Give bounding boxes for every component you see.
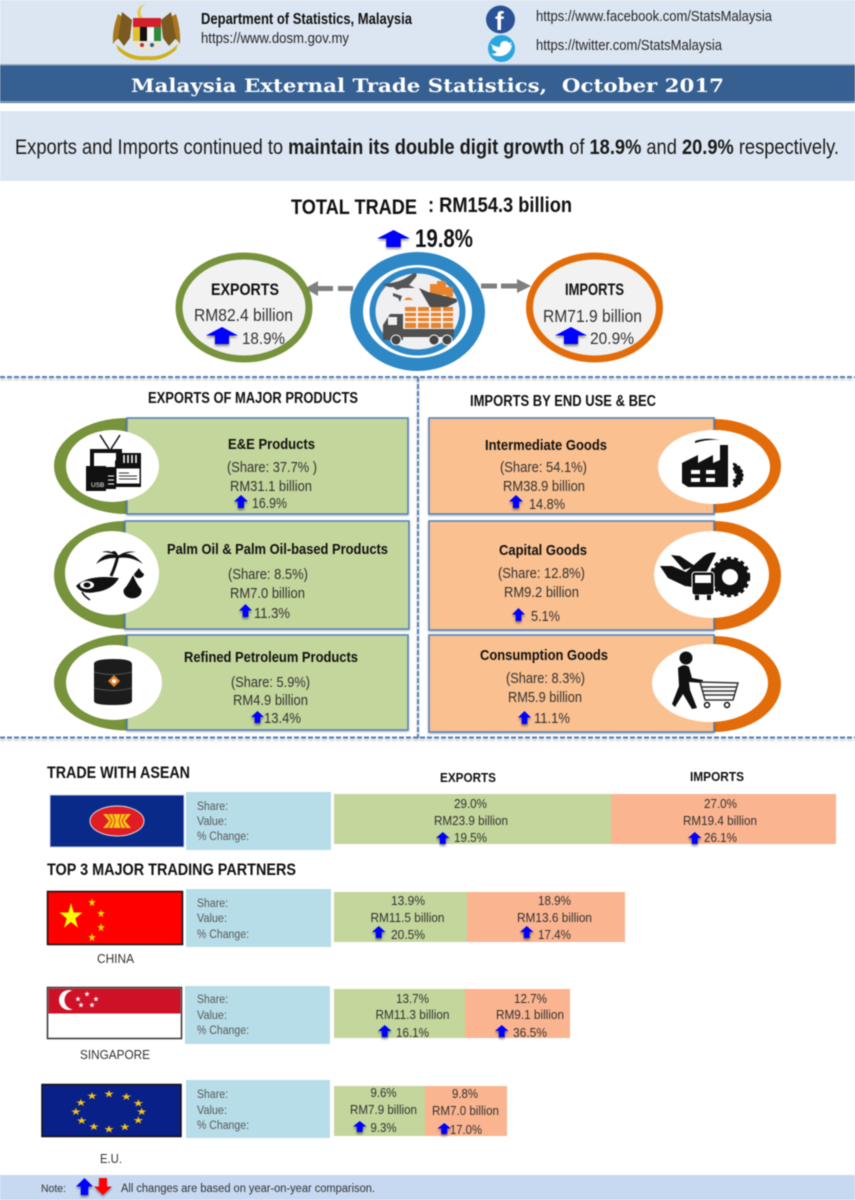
product: refined petroleum: RM4.9 billion [233, 692, 308, 709]
product: intermediate goods: Intermediate Goods [485, 437, 607, 454]
total trade heading: TOTAL TRADE [291, 196, 417, 219]
product: consumption goods: RM5.9 billion [508, 689, 582, 706]
labels: Singapore: % Change: [197, 1025, 249, 1037]
icon: small plane [393, 293, 402, 302]
labels: E.U.: Value: [197, 1105, 227, 1117]
bar: E.U. exports: 9.6% [370, 1085, 397, 1100]
bar: E.U. imports: 17.0% [450, 1122, 482, 1137]
imports circle [530, 256, 660, 359]
total trade heading: 19.8% [415, 225, 473, 253]
bar: Singapore exports [334, 989, 465, 1040]
labels: Singapore: Value: [197, 1010, 227, 1022]
bar: E.U. exports [334, 1085, 425, 1136]
footer note [0, 1175, 855, 1200]
icon: oil barrel [94, 659, 132, 705]
bar: Singapore imports [465, 989, 570, 1040]
bar: E.U. exports: RM7.9 billion [350, 1102, 417, 1117]
imports circle: 20.9% [590, 329, 634, 348]
product: E&E: 16.9% [252, 495, 287, 512]
bar: Singapore imports: 12.7% [514, 991, 547, 1006]
exports circle: RM82.4 billion [194, 305, 293, 325]
exports circle: 18.9% [242, 329, 285, 348]
labels: China [186, 889, 331, 947]
icon: truck [383, 307, 454, 345]
facebook url: https://www.facebook.com/StatsMalaysia [536, 8, 773, 25]
product: E&E: E&E Products [228, 436, 315, 453]
bar: China imports: 18.9% [538, 893, 571, 908]
bar: E.U. exports: 9.3% [370, 1120, 397, 1135]
footer note: All changes are based on year-on-year comparison. [121, 1183, 375, 1195]
bar: E.U. imports: 9.8% [452, 1086, 478, 1101]
product: refined petroleum: 13.4% [264, 710, 301, 727]
heading: trade with ASEAN: TRADE WITH ASEAN [47, 763, 190, 782]
total trade heading: : RM154.3 billion [428, 194, 572, 217]
heading: top 3: TOP 3 MAJOR TRADING PARTNERS [47, 860, 296, 879]
product: palm oil: RM7.0 billion [230, 585, 305, 602]
column heading: exports: EXPORTS [440, 770, 496, 785]
labels: ASEAN: Value: [197, 816, 227, 828]
total trade heading [291, 194, 572, 253]
section: trade with ASEAN [47, 763, 836, 850]
panel: exports of major products [54, 390, 409, 730]
bar: Singapore exports: 16.1% [396, 1025, 429, 1040]
icon: electronics: USB [91, 482, 104, 489]
bar: E.U. imports [425, 1086, 507, 1137]
product: palm oil: Palm Oil & Palm Oil-based Products [167, 541, 388, 558]
header band [0, 0, 855, 64]
product: refined petroleum: (Share: 5.9%) [231, 674, 310, 691]
product: E&E: RM31.1 billion [230, 478, 312, 495]
product: capital goods: Capital Goods [499, 542, 587, 559]
product: capital goods: 5.1% [531, 608, 560, 625]
product: E&E [54, 418, 408, 514]
flag: China [48, 892, 182, 944]
arrow: to imports [481, 279, 531, 293]
icon: factory [682, 439, 743, 487]
label: Singapore: SINGAPORE [80, 1047, 150, 1062]
label: E.U.: E.U. [100, 1151, 122, 1166]
bar: ASEAN imports: 27.0% [704, 796, 737, 811]
product: capital goods: (Share: 12.8%) [498, 565, 585, 582]
bar: China imports: 17.4% [538, 927, 571, 942]
bar: China imports: RM13.6 billion [517, 910, 592, 925]
labels: ASEAN: % Change: [197, 831, 249, 843]
partner: Singapore [48, 986, 570, 1062]
labels: Singapore: Share: [197, 994, 228, 1006]
organisation name: Department of Statistics, Malaysia [201, 11, 412, 28]
bar: China imports [467, 892, 625, 942]
arrow: to exports [305, 281, 353, 296]
twitter url: https://twitter.com/StatsMalaysia [536, 37, 723, 54]
labels: China: % Change: [197, 929, 249, 941]
summary sentence: Exports and Imports continued to maintain its double digit growth of 18.9% and 20.9% respectively. [15, 136, 839, 159]
bar: ASEAN exports [334, 794, 611, 845]
labels: E.U. [186, 1080, 330, 1138]
product: intermediate goods: (Share: 54.1%) [500, 459, 587, 476]
icon: coat of arms [113, 4, 180, 60]
partner: China [48, 889, 625, 966]
icon: twitter [488, 35, 515, 62]
labels: China: Share: [197, 898, 228, 910]
icon: facebook: f [495, 6, 504, 36]
central trade icon [356, 258, 478, 364]
bar: China exports [334, 892, 467, 942]
product: intermediate goods: 14.8% [529, 496, 565, 513]
icon: ship [419, 281, 457, 307]
icon: electronics [86, 435, 141, 491]
title: Malaysia External Trade Statistics, October 2017 [131, 75, 724, 97]
product: consumption goods: 11.1% [534, 710, 570, 727]
flag: E.U. [42, 1084, 181, 1136]
bar: Singapore exports: RM11.3 billion [376, 1007, 450, 1022]
bar: ASEAN imports: RM19.4 billion [683, 813, 757, 828]
product: capital goods: RM9.2 billion [504, 584, 579, 601]
partner: E.U. [42, 1080, 507, 1166]
labels: China: Value: [197, 913, 227, 925]
product: palm oil [54, 521, 409, 629]
product: refined petroleum [54, 634, 408, 730]
product: intermediate goods: RM38.9 billion [503, 478, 585, 495]
product: consumption goods [429, 635, 781, 732]
bar: China exports: 13.9% [391, 893, 425, 908]
product: intermediate goods [429, 418, 781, 514]
product: refined petroleum: Refined Petroleum Products [184, 649, 358, 666]
product: palm oil: (Share: 8.5%) [228, 566, 308, 583]
labels: E.U.: Share: [197, 1089, 228, 1101]
product: E&E: (Share: 37.7% ) [227, 459, 317, 476]
exports heading: EXPORTS OF MAJOR PRODUCTS [148, 390, 358, 407]
icon: palm tree and oil [76, 551, 144, 600]
section: top 3 major trading partners [42, 860, 625, 1166]
icon: shopper with cart [672, 652, 738, 709]
exports circle: EXPORTS [211, 281, 279, 299]
bar: ASEAN exports: RM23.9 billion [434, 813, 508, 828]
icon: plane [383, 273, 417, 290]
title banner [0, 64, 855, 103]
bar: ASEAN imports [611, 794, 836, 845]
bar: Singapore imports: RM9.1 billion [496, 1007, 564, 1022]
footer note: Note: [41, 1183, 66, 1195]
organisation url: https://www.dosm.gov.my [201, 30, 349, 47]
icon: facebook [486, 6, 515, 36]
labels: ASEAN: Share: [197, 801, 228, 813]
bar: Singapore exports: 13.7% [396, 991, 429, 1006]
imports heading: IMPORTS BY END USE & BEC [470, 393, 656, 410]
flag: ASEAN [50, 795, 184, 847]
bar: Singapore imports: 36.5% [513, 1025, 547, 1040]
product: consumption goods: Consumption Goods [480, 647, 608, 664]
product: palm oil: 11.3% [254, 605, 290, 622]
bar: China exports: RM11.5 billion [370, 910, 444, 925]
imports circle: RM71.9 billion [543, 306, 642, 326]
exports circle [179, 256, 309, 359]
product: consumption goods: (Share: 8.3%) [506, 670, 585, 687]
product: capital goods [429, 521, 781, 630]
bar: E.U. imports: RM7.0 billion [432, 1103, 499, 1118]
flag: Singapore [48, 988, 182, 1038]
column heading: imports: IMPORTS [690, 769, 744, 784]
labels: E.U.: % Change: [197, 1120, 249, 1132]
panel: imports by end use [429, 393, 781, 732]
bar: China exports: 20.5% [391, 927, 425, 942]
label: China: CHINA [97, 951, 134, 966]
summary band [0, 111, 855, 181]
labels: ASEAN [186, 792, 331, 850]
imports circle: IMPORTS [565, 281, 624, 299]
labels: Singapore [185, 986, 330, 1044]
icon: plane, bus and gear [660, 552, 748, 600]
bar: ASEAN imports: 26.1% [704, 830, 737, 845]
bar: ASEAN exports: 29.0% [454, 796, 487, 811]
bar: ASEAN exports: 19.5% [454, 830, 487, 845]
